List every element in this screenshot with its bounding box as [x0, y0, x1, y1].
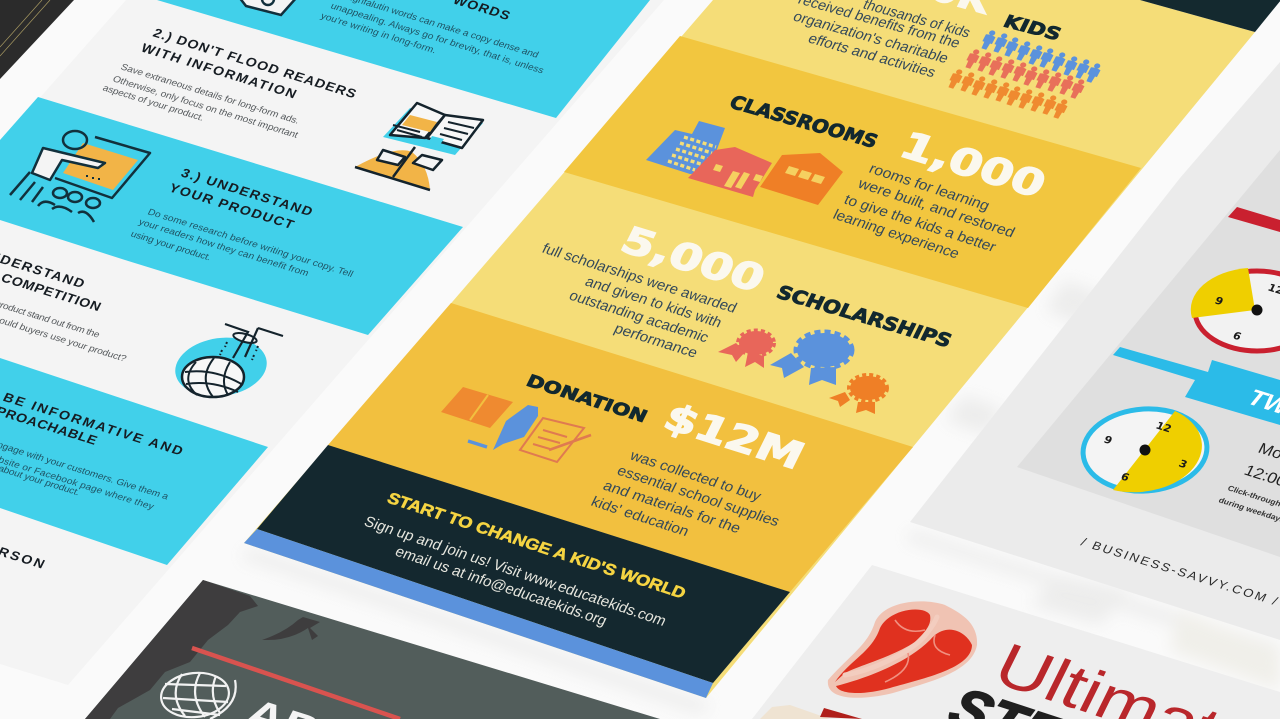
section: donation — [441, 372, 811, 540]
section: classrooms: were built, and restored — [854, 175, 1017, 241]
text: tip 3 — [129, 166, 355, 280]
section: kids — [790, 0, 1103, 119]
clock: red morning chart — [1191, 268, 1280, 351]
section: classrooms: learning experience — [830, 207, 962, 262]
section: scholarships: outstanding academic — [566, 288, 712, 346]
icon: top frame fragment — [239, 0, 297, 15]
section: donation: kids' education — [588, 494, 692, 540]
section: scholarships: 5,000 — [614, 219, 772, 301]
section: donation: and materials for the — [600, 478, 743, 537]
clock: blue afternoon chart: 6 — [1119, 470, 1131, 484]
beige and red blocks — [760, 705, 862, 719]
section: scholarships: performance — [611, 321, 700, 361]
clock: blue afternoon chart: 9 — [1102, 433, 1114, 447]
icon: disco ball — [171, 324, 283, 402]
text: tip 2: Otherwise, only focus on the most important — [111, 74, 300, 141]
icon: t-bone steak — [828, 601, 977, 698]
red heading bar — [1228, 207, 1280, 232]
icon: rows of children — [946, 29, 1103, 120]
clock: blue afternoon chart: 3 — [1177, 457, 1189, 471]
icon: orange ribbon — [829, 375, 887, 414]
panel: dark poster corner — [0, 0, 74, 79]
section: kids: KIDS — [1000, 12, 1065, 45]
section: classrooms: rooms for learning — [866, 161, 992, 214]
text: best time — [1217, 440, 1280, 525]
section: classrooms: CLASSROOMS — [726, 91, 882, 152]
section: scholarships — [539, 219, 956, 414]
text: tip 3: using your product. — [129, 229, 213, 263]
panel: copywriting tips poster — [0, 0, 664, 685]
clock: red morning chart: 9 — [1213, 294, 1225, 308]
panel: ultimate steak poster — [752, 565, 1280, 719]
panel: education infographic — [244, 0, 1280, 698]
text: tip 2: WITH INFORMATION — [139, 41, 299, 101]
section: classrooms: 1,000 — [893, 124, 1053, 207]
section: scholarships: SCHOLARSHIPS — [773, 281, 956, 352]
text: tip 2: Save extraneous details for long-form ads. — [119, 62, 301, 126]
text: tip 3: your readers how they can benefit from — [137, 217, 311, 279]
text: tip 2 — [101, 26, 359, 141]
clock: blue afternoon chart — [1080, 405, 1210, 495]
banner: twitter — [1113, 347, 1280, 443]
section: donation: DONATION — [523, 372, 650, 427]
icon: school buildings — [646, 121, 843, 205]
icon: blue ribbon — [770, 332, 852, 385]
footer call to action: START TO CHANGE A KID'S WORLD — [384, 489, 689, 602]
clock: red morning chart: 6 — [1231, 329, 1243, 343]
panel: business savvy clock poster — [910, 62, 1280, 640]
icon: red ribbon — [718, 330, 774, 368]
section: classrooms — [646, 91, 1053, 262]
text: tip 2: aspects of your product. — [101, 83, 206, 124]
section: classrooms: to give the kids a better — [841, 192, 999, 255]
section: scholarships: full scholarships were awarded — [539, 241, 739, 316]
text: tip 1: unappealing. Always go for brevity, that is, unless — [329, 1, 546, 76]
text: tip 3: Do some research before writing your copy. Tell — [146, 207, 355, 280]
text: tip 4 — [0, 238, 128, 364]
section: donation: essential school supplies — [614, 463, 782, 530]
section: kids: organization's charitable — [790, 9, 951, 67]
background shadows — [240, 280, 1280, 714]
icon: open book — [441, 387, 513, 428]
text: website: / BUSINESS-SAVVY.COM / — [1079, 536, 1280, 608]
text: tip 3: YOUR PRODUCT — [167, 181, 297, 232]
section: scholarships: and given to kids with — [582, 274, 725, 331]
section: donation: $12M — [657, 396, 811, 478]
footer call to action: Sign up and join us! Visit www.educatekids.com — [361, 514, 669, 630]
icon: teacher at board — [10, 131, 150, 222]
clock: blue afternoon chart: 12 — [1154, 419, 1174, 435]
section: donation: was collected to buy — [626, 447, 764, 505]
section: kids: efforts and activities — [805, 31, 938, 81]
icon: notepad and pencil — [520, 418, 591, 462]
text: tip 5 — [0, 382, 186, 512]
icon: open book plant — [355, 103, 483, 190]
panel: dark globe poster — [85, 580, 660, 719]
red rule — [192, 648, 400, 719]
icon: globe — [159, 670, 236, 719]
text: tip 1: you're writing in long-form. — [319, 11, 438, 56]
text: tip 2: 2.) DON'T FLOOD READERS — [151, 26, 359, 101]
text: tip 3: 3.) UNDERSTAND — [179, 166, 315, 219]
icon: fountain pen — [468, 405, 538, 450]
footer call to action: email us at info@educatekids.org — [392, 544, 610, 629]
